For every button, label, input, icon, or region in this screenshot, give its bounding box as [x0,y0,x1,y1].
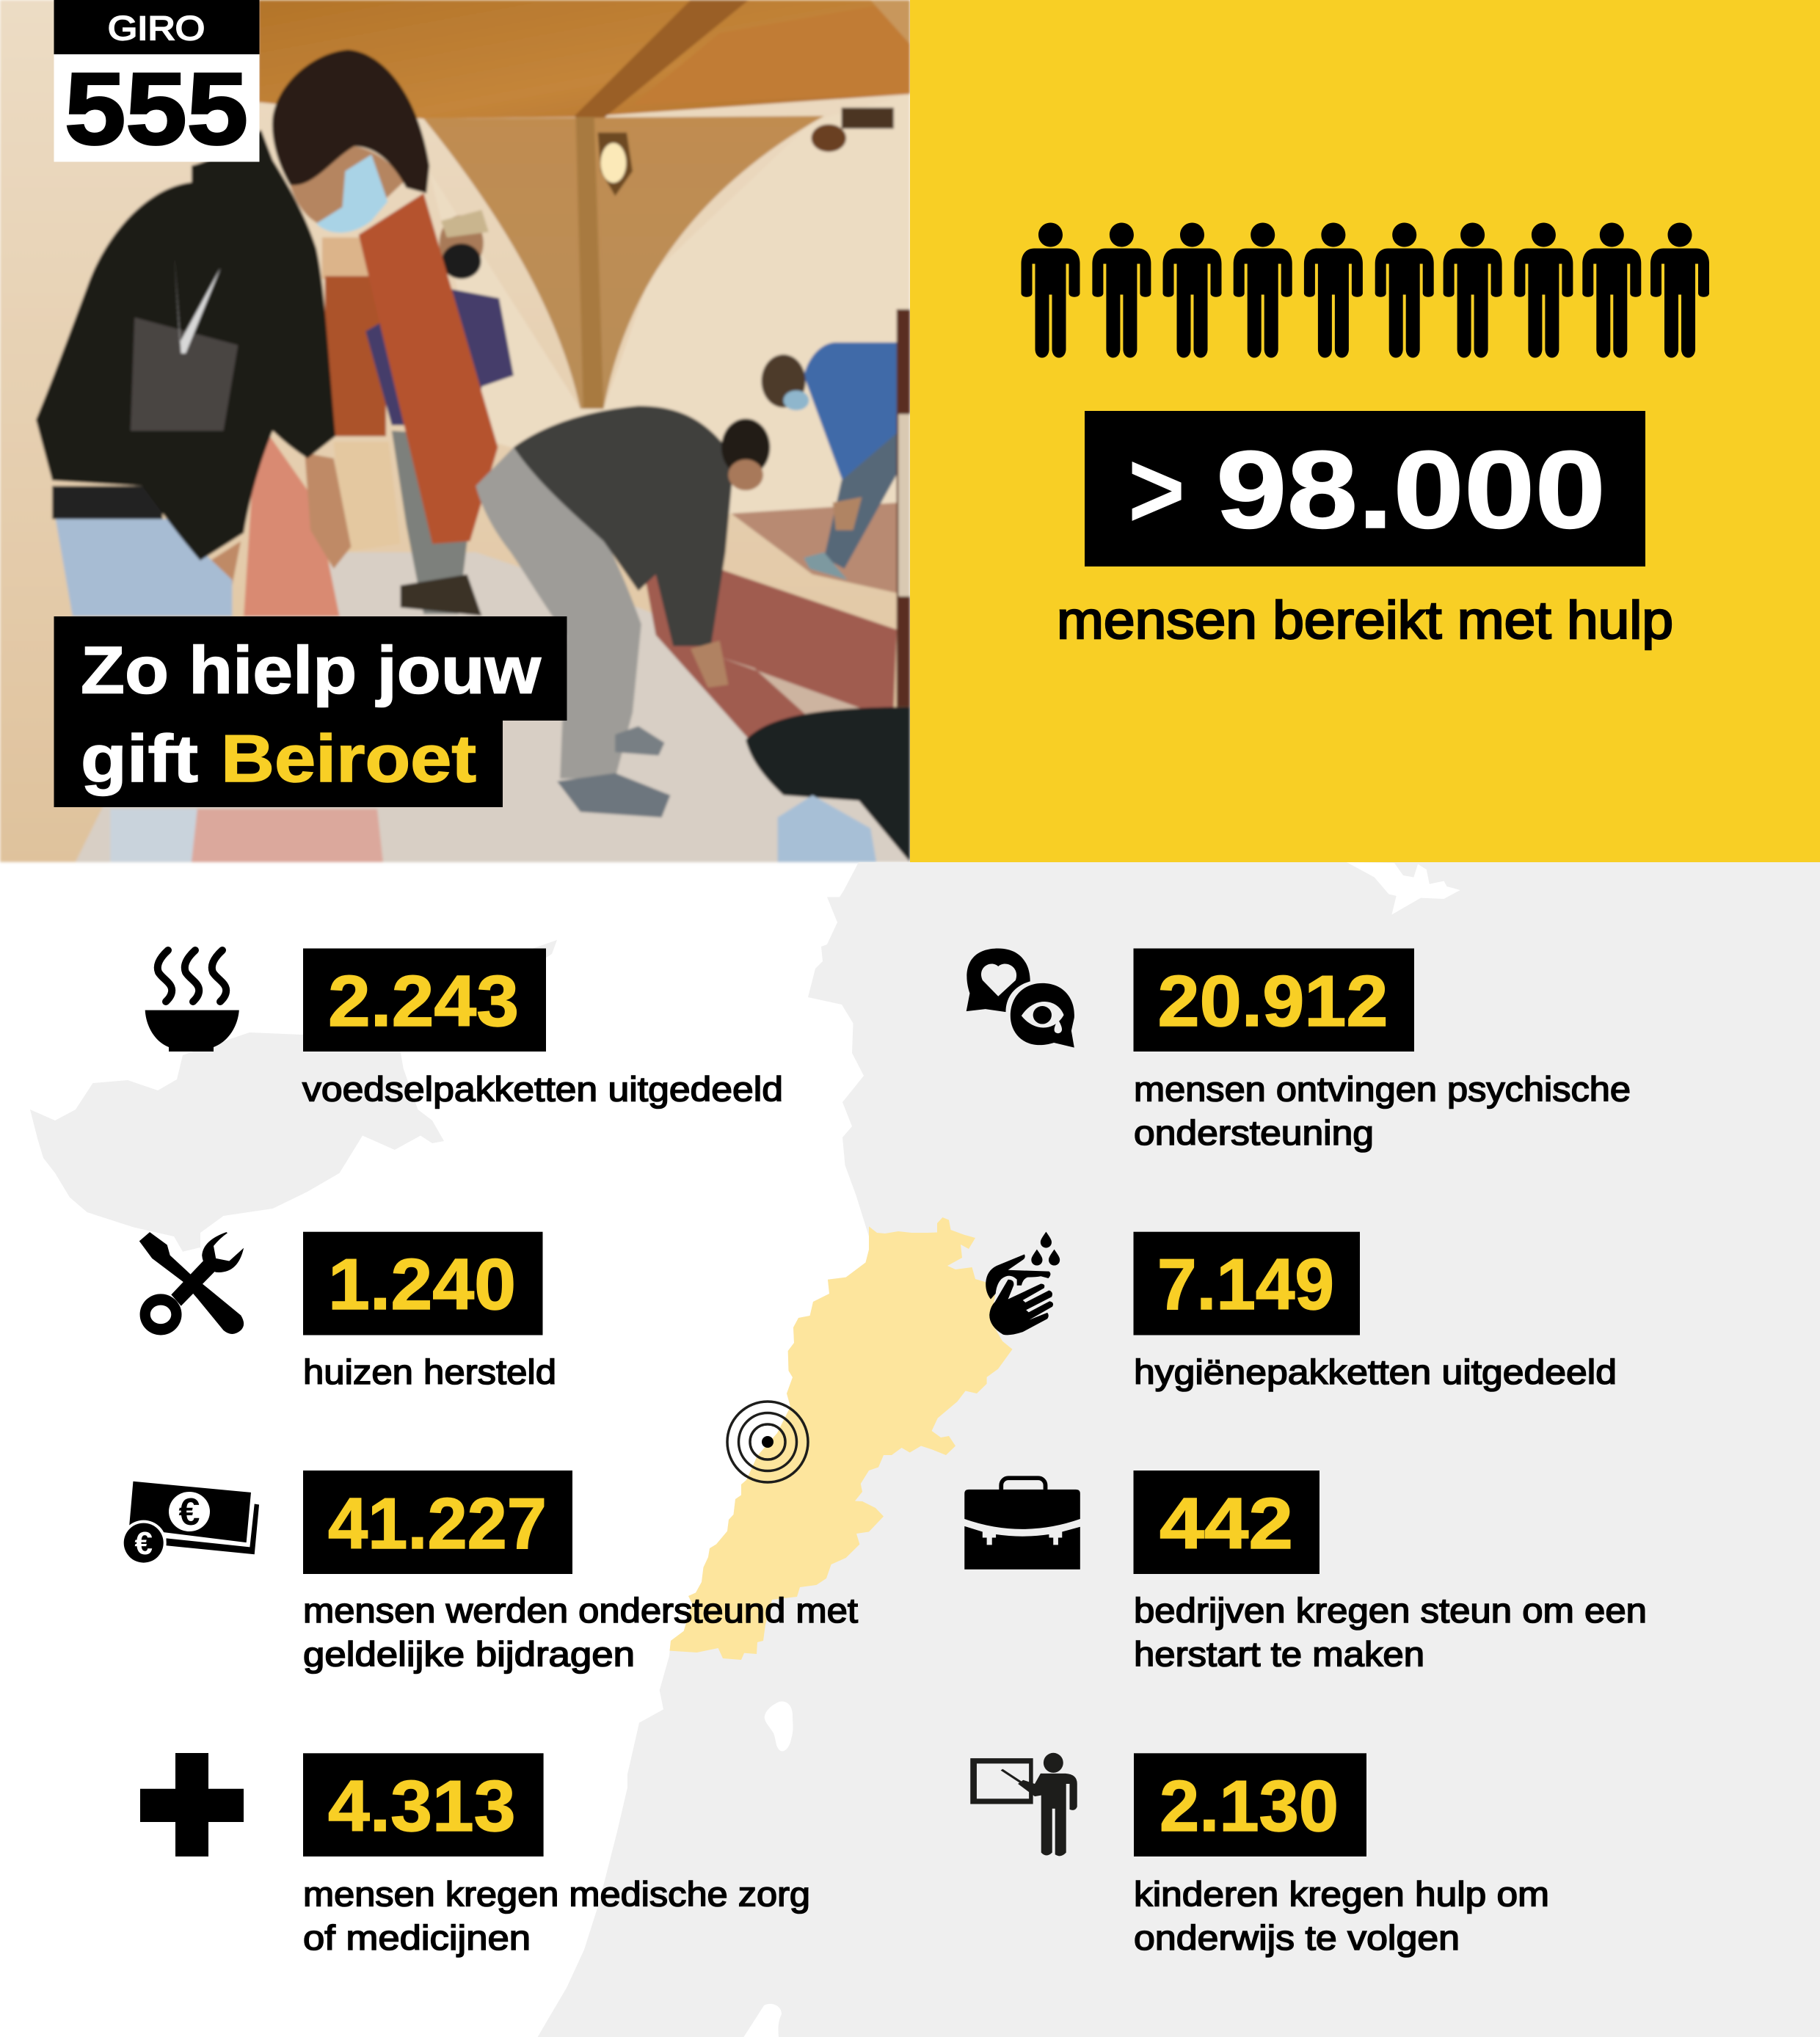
map: dead sea [743,2004,782,2037]
number [1133,1232,1360,1335]
label: huizen hersteld [303,1352,556,1391]
title: gift [81,722,198,796]
number: 7.149 [1157,1244,1334,1324]
icon: steaming bowl [145,950,239,1052]
icon: medical cross [140,1753,244,1856]
stat: financial contributions [121,1471,858,1673]
label: voedselpakketten uitgedeeld [302,1070,783,1108]
label [1134,1070,1631,1152]
title: Zo hielp jouw [81,634,541,707]
stat: hygiene parcels [986,1232,1617,1391]
stat: medical care [140,1753,810,1957]
number: 2.243 [328,961,519,1041]
giro number badge [54,0,260,166]
map background [30,862,1820,2037]
number [1133,948,1414,1052]
stat: food parcels [145,948,783,1108]
label: onderwijs te volgen [1134,1918,1460,1957]
label: ondersteuning [1134,1113,1374,1152]
title [54,616,567,807]
title: Beiroet [221,722,476,796]
icon: crossed tools [139,1232,244,1335]
number [303,948,546,1052]
label [303,1874,810,1957]
number: 2.130 [1160,1765,1339,1846]
label: bedrijven kregen steun om een [1134,1591,1647,1630]
number: 1.240 [328,1244,516,1324]
number [303,1232,543,1335]
map: Lebanon highlighted [669,1217,1013,1660]
number: 442 [1160,1483,1293,1564]
icon: target marker on Beirut [727,1402,808,1482]
giro number badge: GIRO [108,10,205,47]
icon: banknotes and coin: € [179,1491,200,1534]
number [1134,1753,1366,1856]
label: mensen ontvingen psychische [1134,1070,1631,1108]
label [1134,1874,1549,1957]
icon: washing hands [986,1232,1060,1335]
stat: psychological support [967,948,1631,1152]
icon: briefcase [964,1478,1080,1570]
map: land [538,862,1820,2037]
stat: houses repaired [139,1232,556,1391]
label: hygiënepakketten uitgedeeld [1134,1352,1617,1391]
number [303,1471,572,1574]
label: mensen kregen medische zorg [303,1874,810,1914]
label: herstart te maken [1134,1635,1424,1673]
caption: mensen bereikt met hulp [1057,591,1673,650]
number: 41.227 [328,1483,547,1564]
photo panel: workers laying a floor [0,0,910,862]
number: 20.912 [1158,961,1388,1041]
icon: teacher at board [970,1753,1077,1856]
icon: banknotes and coin [121,1482,259,1566]
big number: 98.000 [1216,428,1606,551]
icon: banknotes and coin: € [134,1526,153,1562]
panel: total people reached [910,0,1820,862]
label: geldelijke bijdragen [303,1635,635,1673]
number [303,1753,544,1856]
map: Cyprus [30,940,557,1252]
giro number badge: 555 [65,52,248,166]
map: sea inlet [1347,862,1460,914]
stat: education [970,1753,1549,1957]
label: kinderen kregen hulp om [1134,1874,1549,1914]
big number: > [1128,428,1185,551]
label: mensen werden ondersteund met [303,1591,858,1630]
icon: row of ten people [1022,223,1709,358]
map: lake [765,1702,793,1752]
label [303,1591,858,1673]
number: 4.313 [328,1765,515,1846]
stat: businesses [964,1471,1647,1673]
label: of medicijnen [303,1918,531,1957]
icon: speech bubbles with heart and eye [967,948,1074,1048]
big number [1085,411,1645,566]
label [1134,1591,1647,1673]
number [1133,1471,1320,1574]
